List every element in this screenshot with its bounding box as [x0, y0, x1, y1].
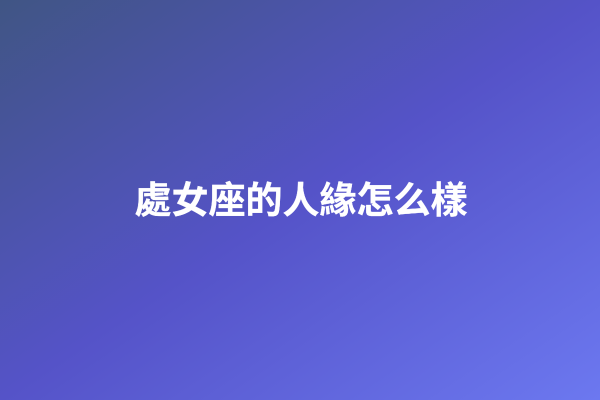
title: 處女座的人緣怎么樣 [134, 180, 468, 221]
